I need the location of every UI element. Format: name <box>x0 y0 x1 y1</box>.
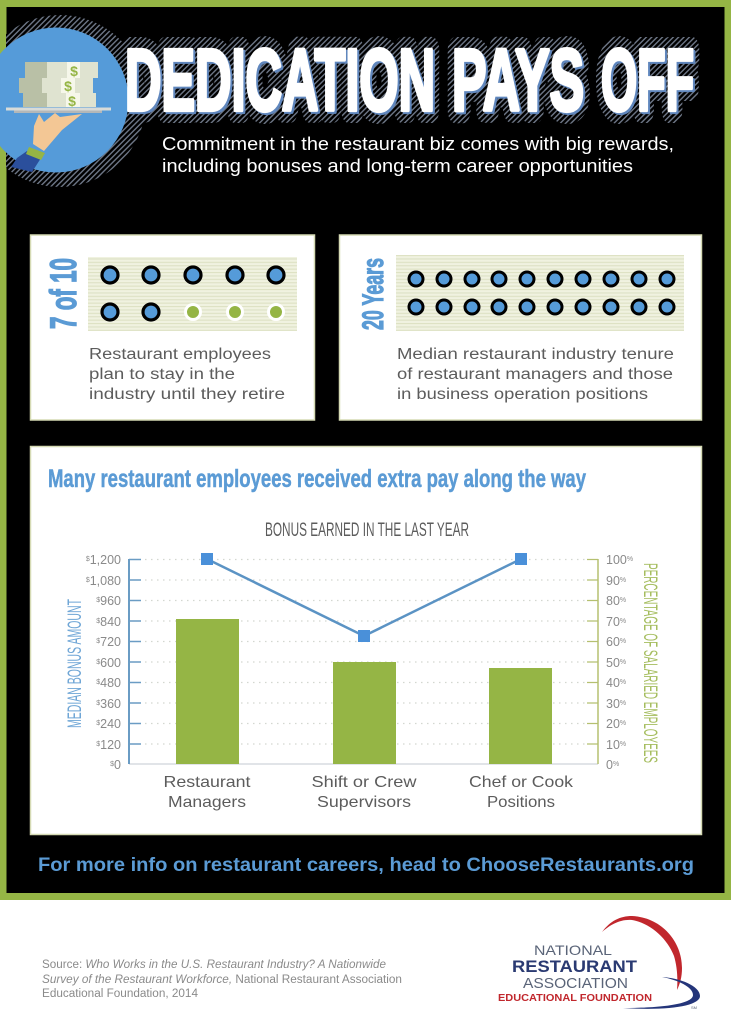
panel: 20 Years <box>340 235 702 420</box>
right axis labels: % <box>620 679 626 686</box>
left axis title: MEDIAN BONUS AMOUNT <box>65 599 86 728</box>
source note <box>42 959 402 1000</box>
line series <box>201 553 527 642</box>
source note: Educational Foundation, 2014 <box>42 988 199 1000</box>
title halo: PAYS <box>452 32 584 129</box>
left axis labels: $ <box>96 618 100 625</box>
left axis labels <box>86 553 121 772</box>
dot chart: 20 Years <box>396 255 684 331</box>
left axis labels: $ <box>96 638 100 645</box>
left axis labels: 120 <box>100 738 121 752</box>
right axis labels: % <box>620 597 626 604</box>
left axis labels: $ <box>86 577 90 584</box>
left axis labels: 720 <box>100 635 121 649</box>
bars <box>176 619 552 764</box>
panel: 7 of 10 <box>30 235 314 420</box>
source note: Survey of the Restaurant Workforce, National Restaurant Association <box>42 974 402 986</box>
description: 20 Years: Median restaurant industry tenure <box>397 346 674 363</box>
right axis labels: % <box>613 761 619 768</box>
category labels: Chef or Cook <box>469 774 574 791</box>
left axis labels: 1,200 <box>90 553 121 567</box>
title halo: DEDICATION <box>125 32 435 129</box>
chart title: BONUS EARNED IN THE LAST YEAR <box>265 519 469 541</box>
subtitle: Commitment in the restaurant biz comes with big rewards, <box>162 134 674 154</box>
subtitle: including bonuses and long-term career opportunities <box>162 156 633 176</box>
left axis labels: 1,080 <box>90 574 121 588</box>
left axis labels: 360 <box>100 697 121 711</box>
panel: bonus chart <box>30 446 702 834</box>
right axis labels: 90 <box>606 574 620 588</box>
left axis labels: 240 <box>100 717 121 731</box>
right axis labels: % <box>620 741 626 748</box>
title: DEDICATION <box>125 32 435 129</box>
description: 7 of 10: industry until they retire <box>89 386 285 403</box>
right axis labels: 60 <box>606 635 620 649</box>
description: 7 of 10: plan to stay in the <box>89 366 235 383</box>
right axis title: PERCENTAGE OF SALARIED EMPLOYEES <box>639 563 660 763</box>
right axis labels: % <box>620 618 626 625</box>
icon: hand holding tray of money: $ <box>70 63 78 79</box>
right axis labels: 20 <box>606 717 620 731</box>
title: PAYS <box>454 34 586 131</box>
stat: 7 of 10: 7 of 10 <box>43 258 84 329</box>
description: 20 Years: of restaurant managers and those <box>397 366 673 383</box>
right axis labels: 70 <box>606 615 620 629</box>
right axis labels: % <box>620 700 626 707</box>
icon: hand holding tray of money <box>0 15 146 187</box>
left axis labels: $ <box>96 741 100 748</box>
left axis labels: $ <box>96 659 100 666</box>
right axis labels: % <box>620 638 626 645</box>
right axis labels: % <box>627 556 633 563</box>
description: 20 Years: in business operation positions <box>397 386 648 403</box>
logo: National Restaurant Association Educational Foundation: SM <box>691 1005 697 1010</box>
left axis labels: 0 <box>114 758 121 772</box>
left axis labels: 960 <box>100 594 121 608</box>
category labels: Shift or Crew <box>312 774 417 791</box>
dot chart: 7 of 10 <box>88 257 297 331</box>
call to action: For more info on restaurant careers, head to ChooseRestaurants.org <box>38 855 694 876</box>
title: PAYS <box>452 32 584 129</box>
description: 7 of 10 <box>89 346 285 403</box>
right axis labels: 100 <box>606 553 627 567</box>
logo: National Restaurant Association Educational Foundation <box>498 916 700 1010</box>
left axis labels: $ <box>86 556 90 563</box>
category labels <box>164 774 574 811</box>
subtitle <box>162 134 674 176</box>
description: 7 of 10: Restaurant employees <box>89 346 271 363</box>
logo: National Restaurant Association Educational Foundation: EDUCATIONAL FOUNDATION <box>498 992 652 1004</box>
logo: National Restaurant Association Educational Foundation: ASSOCIATION <box>523 975 628 992</box>
right axis labels: 0 <box>606 758 613 772</box>
left axis labels: $ <box>96 700 100 707</box>
chart: bonus amount bars and salaried line <box>65 553 660 811</box>
right axis labels: 30 <box>606 697 620 711</box>
left axis labels: 600 <box>100 656 121 670</box>
left axis labels: $ <box>96 720 100 727</box>
left axis labels: $ <box>96 679 100 686</box>
logo: National Restaurant Association Educational Foundation: RESTAURANT <box>512 958 637 976</box>
description: 20 Years <box>397 346 674 403</box>
right axis labels: 80 <box>606 594 620 608</box>
source note: Source: Who Works in the U.S. Restaurant Industry? A Nationwide <box>42 959 386 971</box>
right axis labels: 40 <box>606 676 620 690</box>
right axis labels: % <box>620 720 626 727</box>
right axis labels: 10 <box>606 738 620 752</box>
right axis labels: 50 <box>606 656 620 670</box>
title: DEDICATION <box>127 34 437 131</box>
left axis labels: $ <box>110 761 114 768</box>
icon: hand holding tray of money: $ <box>64 78 72 94</box>
left axis labels: 480 <box>100 676 121 690</box>
right axis labels <box>606 553 633 772</box>
right axis labels: % <box>620 577 626 584</box>
category labels: Managers <box>168 794 246 811</box>
left axis labels: $ <box>96 597 100 604</box>
category labels: Positions <box>487 794 555 811</box>
right axis labels: % <box>620 659 626 666</box>
logo: National Restaurant Association Educational Foundation: NATIONAL <box>534 942 612 958</box>
category labels: Restaurant <box>164 774 251 791</box>
icon: hand holding tray of money: $ <box>68 93 76 109</box>
category labels: Supervisors <box>317 794 411 811</box>
stat: 20 Years: 20 Years <box>357 258 390 330</box>
left axis labels: 840 <box>100 615 121 629</box>
